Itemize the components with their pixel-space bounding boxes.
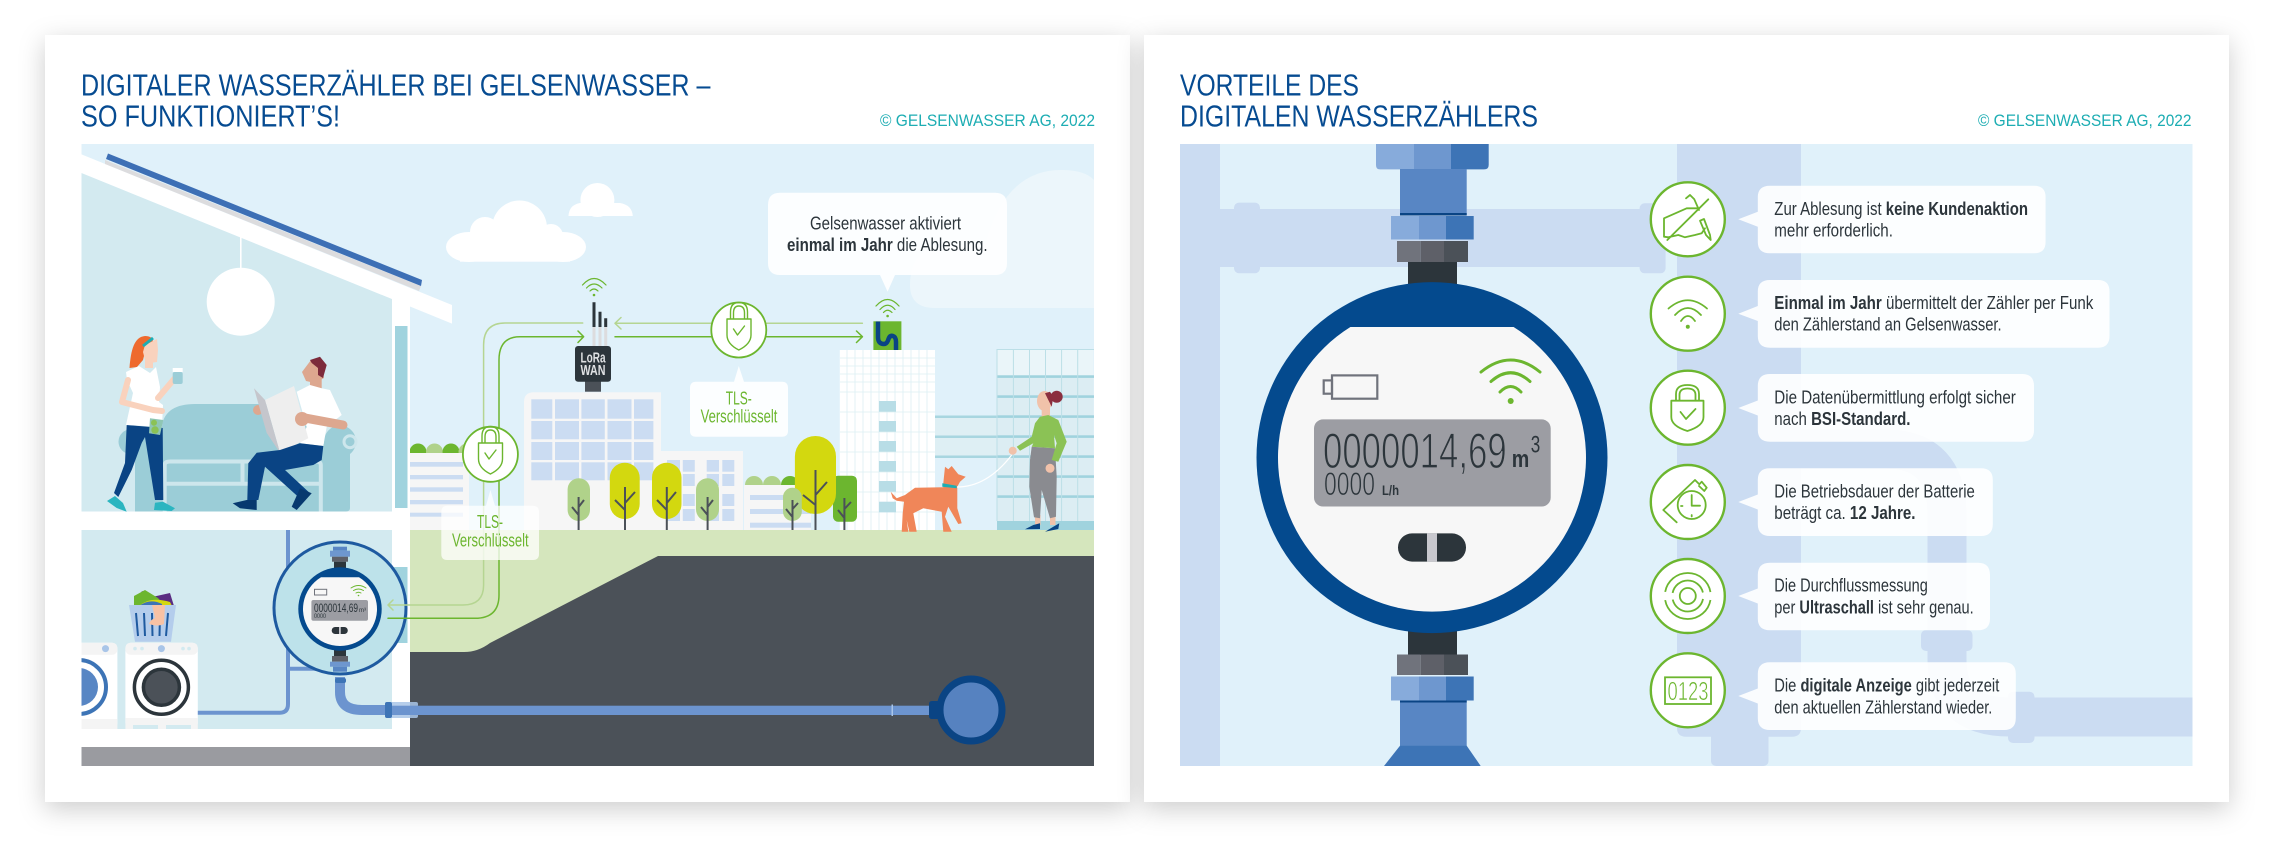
callout text: Die Durchflussmessung	[1774, 575, 1928, 596]
callout: TLS gateway link: TLS-	[726, 388, 752, 408]
icon: ultrasonic rings	[1651, 559, 1725, 633]
callout text: nach BSI-Standard.	[1774, 408, 1911, 429]
callout: TLS meter link	[441, 490, 539, 560]
lamp	[207, 237, 275, 336]
meter body	[1256, 282, 1608, 633]
callout text	[1738, 374, 2034, 442]
walls	[82, 326, 410, 747]
lower room	[82, 530, 392, 729]
gateway to utility arrows	[615, 318, 862, 329]
laundry basket	[129, 590, 176, 642]
LCD display: 3	[1531, 432, 1540, 458]
water meter small: 0000	[314, 614, 327, 620]
lock badge: gateway link	[711, 302, 766, 358]
callout text: den Zählerstand an Gelsenwasser.	[1774, 314, 2002, 335]
solar panel	[105, 154, 422, 291]
LCD display: m	[1512, 446, 1529, 473]
upper room	[82, 173, 392, 512]
water meter small: m³	[359, 608, 366, 614]
connection lines	[388, 318, 862, 618]
benefit: no customer action	[1651, 182, 2046, 256]
headquarters tower	[840, 350, 935, 530]
underground water main	[417, 679, 1002, 741]
heading: advantages	[1180, 69, 1538, 134]
callout text	[1738, 468, 1993, 536]
callout text: Zur Ablesung ist keine Kundenaktion	[1774, 198, 2028, 219]
icon: wifi	[1481, 360, 1540, 404]
benefit: battery life	[1651, 465, 1993, 539]
inlet pipe	[335, 677, 418, 718]
green-roof building	[410, 444, 469, 530]
illustration background	[1180, 144, 2192, 766]
callout text: den aktuellen Zählerstand wieder.	[1774, 696, 1992, 717]
water meter small	[298, 547, 382, 672]
LoRaWAN gateway	[575, 278, 611, 392]
person: man reading	[233, 357, 343, 510]
callout text: Die Datenübermittlung erfolgt sicher	[1774, 386, 2016, 407]
person: woman with dog	[1009, 391, 1067, 532]
illustration: house, city and network	[52, 144, 1094, 766]
Gelsenwasser logo	[873, 300, 901, 350]
LoRaWAN gateway: WAN	[580, 363, 606, 379]
meter zoom circle	[274, 542, 406, 674]
glass tower	[997, 349, 1094, 530]
callout: annual reading: einmal im Jahr die Ablesung.	[787, 234, 988, 255]
person: woman with glass	[107, 336, 183, 512]
buildings	[410, 349, 1094, 530]
lock badge: meter link	[463, 426, 518, 482]
icon: lock	[1651, 371, 1725, 445]
callout: TLS gateway link: Verschlüsselt	[701, 407, 777, 427]
cloud large	[446, 200, 586, 262]
water pipes indoors	[198, 530, 330, 713]
water meter small: 0000014,69	[314, 601, 358, 615]
benefit: secure transfer	[1651, 371, 2034, 445]
uplink arrow from meter	[388, 331, 584, 618]
cloud small	[568, 183, 633, 217]
washing machines	[82, 642, 198, 729]
heading: how it works: DIGITALER WASSERZÄHLER BEI GELSENWASSER –	[81, 69, 711, 103]
trees	[568, 436, 857, 530]
sofa	[118, 404, 356, 512]
icon: digital display	[1651, 653, 1725, 727]
office building	[524, 392, 743, 530]
benefit: ultrasonic	[1651, 559, 1990, 633]
dog	[891, 466, 966, 532]
background pipes	[1180, 144, 2034, 766]
callout text	[1738, 186, 2046, 253]
small green-roof building	[744, 476, 811, 530]
house	[52, 154, 452, 766]
benefit: annual radio	[1651, 277, 2110, 351]
heading: advantages: DIGITALEN WASSERZÄHLERS	[1180, 100, 1538, 134]
icon: battery with clock	[1651, 465, 1725, 539]
icon: crossed-out writing hand	[1651, 182, 1725, 256]
roof	[82, 154, 452, 326]
callout text	[1738, 563, 1990, 630]
LCD display: 0000	[1324, 466, 1375, 502]
LCD display	[1314, 419, 1551, 506]
heading: advantages: VORTEILE DES	[1180, 69, 1359, 103]
leash	[957, 455, 1012, 487]
water meter large	[1256, 144, 1608, 766]
icon: battery	[1324, 375, 1377, 399]
icon: wifi	[1651, 277, 1725, 351]
icon: utility wifi	[876, 300, 899, 317]
callout: TLS gateway link	[690, 366, 788, 437]
copyright: © GELSENWASSER AG, 2022	[880, 112, 1095, 130]
heading: how it works	[81, 69, 711, 134]
callout: TLS meter link: TLS-	[477, 512, 503, 532]
callout: annual reading: Gelsenwasser aktiviert	[810, 212, 961, 233]
LCD display: L/h	[1382, 482, 1399, 498]
callout: annual reading	[768, 193, 1007, 292]
callout text: Einmal im Jahr übermittelt der Zähler per Funk	[1774, 292, 2094, 313]
callout: TLS meter link: Verschlüsselt	[452, 531, 529, 551]
callout text	[1738, 280, 2110, 348]
LoRaWAN gateway: LoRa	[580, 351, 606, 367]
panel: how it works	[45, 35, 1130, 802]
callout text: per Ultraschall ist sehr genau.	[1774, 596, 1974, 617]
callout text: mehr erforderlich.	[1774, 220, 1893, 241]
icon: gateway wifi	[582, 278, 606, 296]
downlink arrow to meter	[388, 323, 583, 610]
callout text: beträgt ca. 12 Jahre.	[1774, 502, 1916, 523]
ground and soil	[410, 530, 1094, 766]
callout text	[1738, 662, 2016, 730]
sensor pill	[1398, 533, 1466, 562]
background cloud	[910, 170, 1094, 308]
copyright: © GELSENWASSER AG, 2022	[1978, 112, 2192, 130]
panel: advantages	[1144, 35, 2229, 802]
glass low building	[935, 416, 997, 458]
callout text: Die Betriebsdauer der Batterie	[1774, 480, 1975, 501]
LCD display: 0000014,69	[1323, 423, 1507, 479]
callout text: Die digitale Anzeige gibt jederzeit	[1774, 675, 1999, 696]
heading: how it works: SO FUNKTIONIERT’S!	[81, 100, 340, 134]
icon: digital display: 0123	[1668, 676, 1708, 706]
top fittings	[1376, 144, 1489, 292]
benefit: digital display	[1651, 653, 2016, 730]
bottom fittings	[1384, 625, 1481, 766]
